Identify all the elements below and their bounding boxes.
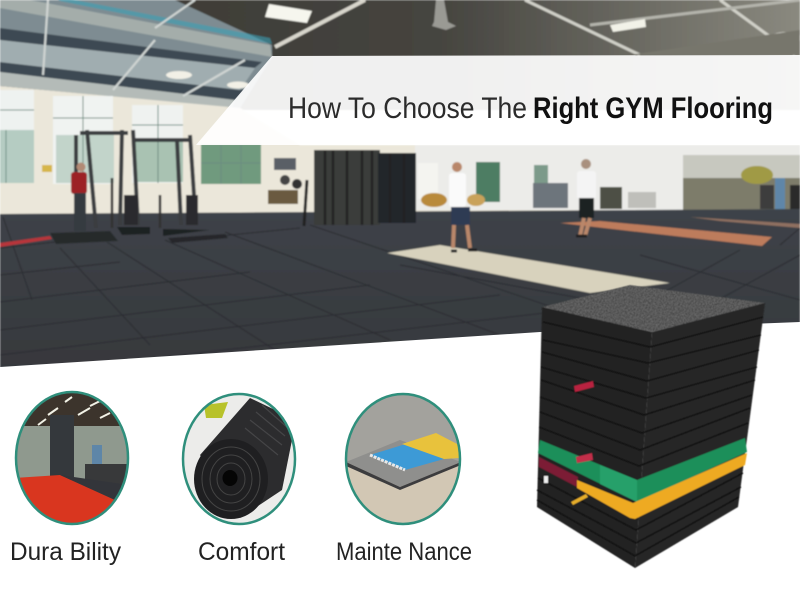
maintenance ring bbox=[346, 394, 460, 524]
person in red shirt bbox=[71, 162, 87, 231]
ceiling bbox=[0, 0, 800, 110]
durability ring bbox=[16, 392, 128, 524]
back right wall with plants and mirror bbox=[418, 155, 800, 210]
stack of flooring tiles bbox=[537, 285, 765, 568]
title light part: How To Choose The bbox=[288, 92, 527, 125]
maroon tile bbox=[539, 457, 578, 487]
orange floor mat bbox=[560, 221, 772, 246]
feature: maintenance bbox=[336, 394, 472, 566]
durability image bbox=[15, 392, 129, 525]
back wall and windows bbox=[0, 86, 800, 214]
background photo: gym hall bbox=[0, 0, 800, 370]
yellow tile bbox=[577, 453, 747, 519]
person in white shirt, front bbox=[449, 162, 477, 251]
comfort label: Comfort bbox=[198, 538, 285, 566]
cream floor mat bbox=[387, 245, 670, 293]
red tab lower bbox=[576, 453, 593, 463]
stack right face bbox=[635, 303, 765, 568]
durability label: Dura Bility bbox=[10, 538, 121, 566]
stack left face bbox=[537, 307, 652, 568]
thin orange strip bbox=[690, 217, 800, 228]
rubber floor bbox=[0, 209, 800, 370]
stack top face bbox=[542, 285, 765, 332]
title banner bbox=[196, 55, 800, 145]
yellow tab bbox=[571, 494, 588, 505]
maintenance label: Mainte Nance bbox=[336, 538, 472, 566]
white tag bbox=[544, 476, 548, 483]
red tab upper bbox=[574, 381, 594, 392]
feature: durability bbox=[10, 392, 129, 566]
squat racks bbox=[50, 130, 228, 244]
green tile bbox=[538, 438, 747, 502]
person in white shirt, back bbox=[576, 159, 596, 236]
storage racks bbox=[304, 150, 416, 226]
maintenance image bbox=[345, 394, 461, 525]
comfort image bbox=[182, 394, 296, 525]
feature: comfort bbox=[182, 394, 296, 566]
comfort ring bbox=[183, 394, 295, 524]
title bbox=[288, 92, 773, 125]
